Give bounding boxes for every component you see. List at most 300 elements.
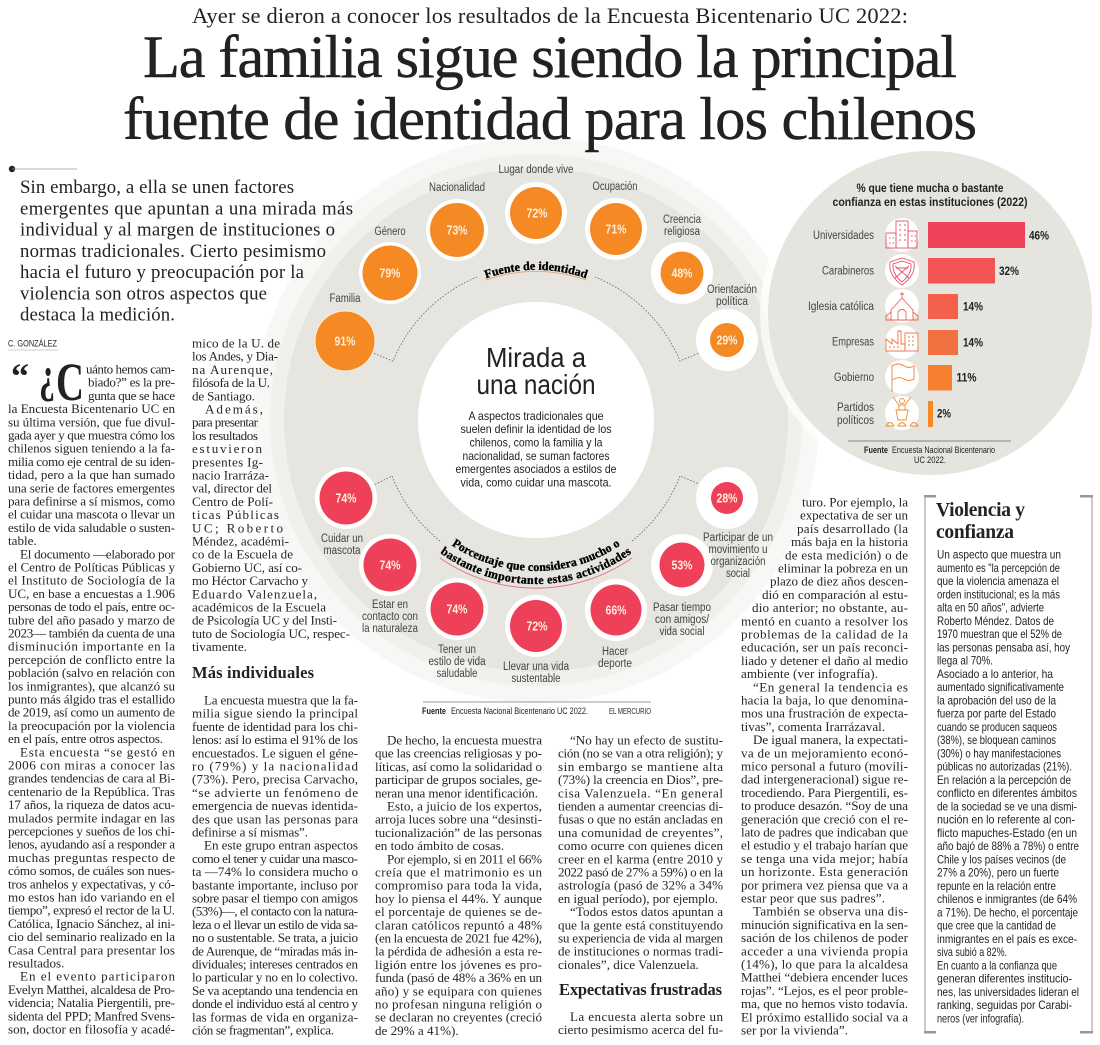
activity: Participar de un movimiento 28%: Participar de un [703,532,773,544]
article column 1: muchas preguntas respecto de [8,850,175,865]
article column 4: cisa Valenzuela. “En general [558,785,723,800]
article column 4: sin embargo se mantiene alta [558,759,723,774]
article column 2 bottom: ro (79%) y la nacionalidad [192,758,358,774]
row: Iglesia católica 14%: 14% [963,300,983,314]
infographic source line: Fuente [422,706,446,717]
activity: Tener un estilo saludable 74%: estilo de vida [428,656,486,668]
activity: Estar en contacto 74%: Estar en [372,599,408,611]
row: Carabineros 32% [822,254,1019,288]
article column 1: percepciones y sueños de los chi- [8,824,175,839]
article column 2 top: co de la Escuela de [192,547,293,562]
article column 5: mentó en cuanto a resolver los [741,613,908,628]
article column 1: en el país, entre otros aspectos. [8,731,163,746]
article column 5: tivas”, comenta Irarrázaval. [741,719,885,734]
article column 4: fusas o que no están ancladas en [558,812,723,827]
row: Empresas 14% [832,325,983,359]
panel text: siva subió a 82%. [937,945,1007,959]
article column 5: También se observa una dis- [753,904,908,919]
article column 2 bottom: (53%)—, el contacto con la natura- [192,904,358,919]
panel text: fuerza por parte del Estado [937,706,1056,720]
article column 2 bottom: En este grupo entran aspectos [204,838,358,853]
infographic background: concentric rings [253,137,1100,703]
row: Partidos políticos 2%: Partidos [837,402,874,414]
article column 5: generación que creció con el re- [741,811,908,826]
row: Partidos políticos 2%: 2% [937,406,951,420]
article column 3: creía que el matrimonio es un [375,864,542,880]
article column 5: de esta medición) o de [785,547,908,562]
heading: Expectativas frustradas: Expectativas frustradas [559,980,723,999]
article column 3: en todo ámbito de cosas. [375,838,504,853]
article column 3: la pérdida de adhesión a esta re- [375,944,542,959]
article column 1: el cuidar una mascota o llevar un [8,507,175,522]
panel text: cuando se producen saqueos [937,720,1057,734]
lead paragraph: destaca la medición. [20,304,175,326]
panel text: repunte en la relación entre [937,879,1056,893]
article column 1: mo estos han ido variando en el [8,890,175,905]
activity: Participar de un movimiento 28%: movimiento u [708,544,768,556]
article column 2 bottom: emergencia de nuevas identida- [192,798,358,813]
article column 4: tienden a aumentar creencias di- [558,798,723,814]
panel: Violencia y confianza [924,495,1093,1034]
panel text: conflicto en diferentes ámbitos [937,786,1077,800]
article column 3: compromiso para toda la vida, [375,878,542,893]
article column 2 bottom: sobre pasar el tiempo con amigos [192,890,358,906]
identity: Nacionalidad 73%: 73% [446,224,468,238]
article column 5: mico personal a futuro (movili- [741,758,908,774]
article column 5: dad intergeneracional) sigue re- [741,772,908,787]
chart title: % que tiene mucha o bastante [856,181,1004,195]
article column 4: como ocurre con quienes dicen [558,838,723,853]
activity: Cuidar un mascota 74%: mascota [324,545,361,557]
panel text: En relación a la percepción de [937,773,1071,787]
article column 4: creer en el karma (entre 2010 y [558,851,723,866]
article column 2 bottom: lo particular y no en lo colectivo. [192,970,358,985]
article column 5: minución significativa en la sen- [741,917,908,932]
activity: Cuidar un mascota 74% [315,467,377,557]
center description: vida, como cuidar una mascota. [460,476,612,490]
identity: Familia 91% [314,293,376,372]
infographic source line: EL MERCURIO [609,706,651,716]
article column 3: participar de grupos sociales, ge- [375,772,542,787]
article column 1: su última versión, que fue divul- [8,414,175,429]
article column 3: se declaran no creyentes (creció [375,1010,542,1025]
article column 1: la preocupación por la violencia [8,718,175,733]
article column 5: acceder a una vivienda propia [741,943,908,958]
article column 1: videncia; Natalia Piergentili, pre- [8,995,175,1010]
article column 1: Evelyn Matthei, alcaldesa de Pro- [8,982,175,997]
article column 3: el porcentaje de quienes se de- [375,904,542,919]
activity: Participar de un movimiento 28%: social [726,568,750,580]
article column 5: liado y detener el daño al medio [741,653,908,668]
article column 2 top: Centro de Polí- [192,494,273,509]
article column 5: ambiente (ver infografía). [741,666,878,681]
identity: Lugar donde vive 72%: Lugar donde vive [498,164,574,176]
center description: suelen definir la identidad de los [460,422,612,436]
article column 1: Esta encuesta “se gestó en [20,744,175,759]
panel text: llega al 70%. [937,654,993,668]
article column 1: Católica, Ignacio Sánchez, al ini- [8,916,175,931]
article column 2 bottom: dividuales; intereses centrados en [192,956,358,972]
identity: Nacionalidad 73%: Nacionalidad [429,182,485,194]
article column 2 bottom: de Aurenque, de “miradas más in- [192,943,358,958]
row: Carabineros 32%: Carabineros [822,266,874,278]
panel text: (38%), se bloquean caminos [937,733,1056,747]
chart source: Encuesta Nacional Bicentenario [892,445,995,455]
lead marker [9,166,77,172]
center text: Mirada a una nación: Mirada a [486,342,586,373]
article column 1: tros anhelos y expectativas, y có- [8,876,175,891]
article column 5: ser por la vivienda”. [741,1023,848,1038]
article column 2 bottom: leza o el llevar un estilo de vida sa- [192,917,358,932]
panel text: alta en 50 años", advierte [937,600,1044,614]
article column 2 top: na Aurenque, [192,362,273,377]
article column 4: su experiencia de vida al margen [558,930,723,946]
article column 2 top: ticas Públicas [192,507,279,522]
activity: Hacer deporte 66% [585,579,647,670]
article column 2 top: filósofa de la U. [192,375,270,390]
lead paragraph [20,177,353,326]
article column 5: más baja en la historia [791,534,908,549]
article column 5: dió en comparación al estu- [762,587,908,602]
article column 2 bottom: lenos: así lo estima el 91% de los [192,732,358,747]
activity: Cuidar un mascota 74%: Cuidar un [321,533,363,545]
article column 1: los inmigrantes), que alcanzó su [8,678,175,693]
article column 1: estilo de vida saludable o susten- [8,520,175,535]
article column 1: cómo somos, de cuáles son nues- [8,863,175,878]
article column 1: disminución importante en la [8,639,175,654]
row: Iglesia católica 14%: Iglesia católica [808,301,875,313]
row: Partidos políticos 2%: políticos [837,415,874,427]
article column 3: no profesan ninguna religión o [375,996,542,1012]
article column 1: chilenos siguen teniendo a la fa- [8,441,175,456]
article column 2 top: académicos de la Escuela [192,600,326,614]
activity: Participar de un movimiento 28%: 28% [716,492,738,506]
article column 1: el Centro de Políticas Públicas y [8,560,175,574]
activity: Llevar una vida sustentable 72% [503,595,570,685]
panel heading [936,500,1025,543]
article column 1: punto más álgido tras el estallido [8,692,175,706]
article column 5: De igual manera, la expectati- [753,732,908,747]
heading: Porcentaje que considera: Porcentaje que considera mucho o [452,538,620,572]
article column 2 bottom: Se va aceptando una tendencia en [192,983,358,998]
article column 2 top: de Psicología UC y del Insti- [192,613,337,628]
activity: Tener un estilo saludable 74%: 74% [446,602,468,616]
article column 1: lenos, ayudando así a responder a [8,837,175,852]
activity: Pasar tiempo con amigos 53%: Pasar tiempo [653,602,711,614]
article column 4: (73%) la creencia en Dios”, pre- [558,772,723,787]
article column 1: uánto hemos cam- [86,362,175,376]
panel frame [924,495,1093,1034]
article column 3: año) y se equipara con quienes [375,983,542,998]
article column 1: tiempo”, expresó el rector de la U. [8,903,175,918]
panel text: públicas no autorizadas (21%). [937,760,1072,774]
article column 4: ción (no se van a otra religión); y [558,746,723,761]
article column 2 bottom: fuente de identidad para los chi- [192,719,358,734]
drop cap [11,346,84,412]
article column 4: “Todos estos datos apuntan a [570,904,723,919]
identity: Creencia religiosa 48%: 48% [672,266,692,280]
article column 2 top: los resultados [192,428,258,443]
identity: Creencia religiosa 48%: Creencia [663,214,701,226]
activity: Llevar una vida sustentable 72%: 72% [526,620,548,634]
row: Universidades 46%: Universidades [813,230,874,242]
panel text: orden institucional; es la más [937,587,1060,601]
article column 2 top: Gobierno UC, así co- [192,560,302,575]
article column 5: se tenga una vida mejor; había [741,851,908,866]
identity: Ocupación 71%: 71% [606,222,626,236]
article column 1: UC, en base a encuestas a 1.906 [8,586,175,601]
panel text: chilenos e inmigrantes (de 64% [937,892,1077,906]
identity: Familia 91%: Familia [330,293,361,305]
identity: Ocupación 71% [585,181,647,260]
activity: Llevar una vida sustentable 72%: sustentable [512,673,560,685]
article column 2 bottom: donde el individuo está al centro y [192,996,358,1011]
article column 2 top: tuto de Sociología UC, respec- [192,626,350,641]
article column 1: tubre del año pasado y marzo de [8,612,175,627]
article column 5: turo. Por ejemplo, la [802,494,908,510]
article column 2 top: Eduardo Valenzuela, [192,586,317,601]
article column 4: que la gente está constituyendo [558,917,723,932]
article column 5: hacia la baja, lo que denomina- [741,692,908,708]
article column 5: trocediendo. Para Piergentili, es- [741,785,908,800]
panel text: Un aspecto que muestra un [937,548,1061,562]
article column 3: funda (pasó de 48% a 36% en un [375,970,542,985]
identity: Nacionalidad 73% [426,182,488,261]
center description: emergentes asociados a estilos de [456,462,617,476]
panel heading: Violencia y [936,500,1025,521]
article column 5: Matthei “debiera encender luces [741,970,908,985]
article column 2 top: de Santiago. [192,388,255,403]
article column 2 bottom: (73%). Pero, precisa Carvacho, [192,772,358,787]
identity: Orientación política 29%: Orientación [707,284,757,296]
article column 1: personas de todo el país, entre oc- [8,599,175,614]
identity: Orientación política 29% [696,284,758,371]
article column 1: población (salvo en relación con [8,665,175,680]
article column 1: Casa Central para presentar los [8,942,175,957]
drop cap: C [56,352,84,412]
panel: confidence in institutions chart [768,151,1092,475]
drop cap: ¿ [39,346,55,402]
article column 3: que las creencias religiosas y po- [375,746,542,761]
center description: nacionalidad, se suman factores [462,449,610,463]
article column 2 bottom: no o sustentable. Se trata, a juicio [192,930,358,945]
lead paragraph: hacia el futuro y preocupación por la [20,262,305,283]
article column 2 bottom: des que usan las personas para [192,811,358,826]
article column 3: neran una menor identificación. [375,785,538,800]
article column 1: son, doctor en filosofía y acadé- [8,1022,175,1037]
activity: Tener un estilo saludable 74%: Tener un [438,644,476,656]
article column 5: país desarrollado (la [797,521,908,536]
kicker: Ayer se dieron a conocer los resultados de la Encuesta Bicentenario UC 2022: [192,3,908,28]
article column 1: de 2019, así como un aumento de [8,705,175,720]
article column 5: un horizonte. Esta generación [741,864,908,879]
article column 2 top: UC; Roberto [192,520,283,535]
article column 5: to produce desazón. “Soy de una [741,798,908,813]
article column 1: 17 años, la riqueza de datos acu- [8,797,175,812]
article column 3: Por ejemplo, si en 2011 el 66% [387,851,542,866]
identity: Género 79%: Género [374,226,406,238]
title: fuente de identidad para los chilenos [123,86,977,153]
row: Empresas 14%: Empresas [832,336,874,348]
row: Partidos políticos 2% [837,396,951,430]
byline: C. GONZÁLEZ [8,338,57,350]
article column 3: arroja luces sobre una “desinsti- [375,812,542,827]
activity: Estar en contacto 74%: contacto con [362,611,418,623]
article column 5: rojas”. “Lejos, es el peor proble- [741,983,908,998]
panel text: aumento es "la percepción de [937,561,1060,575]
identity: Género 79%: 79% [380,266,400,280]
lead paragraph: Sin embargo, a ella se unen factores [20,177,294,198]
title: La familia sigue siendo la principal [143,24,957,91]
panel text: inmigrantes en el país es exce- [937,932,1077,946]
article column 5: (14%), lo que para la alcaldesa [741,957,908,972]
activity: Llevar una vida sustentable 72%: Llevar una vida [503,661,570,673]
article column 2 top: Méndez, académi- [192,534,289,548]
panel text: aumentado significativamente [937,680,1064,694]
article column 5: educación, ser un país reconci- [741,640,908,655]
identity: Creencia religiosa 48% [651,214,713,304]
article column 1: sidenta del PPD; Manfred Svens- [8,1008,175,1023]
identity: Lugar donde vive 72%: 72% [526,206,548,220]
article column 5: dio anterior; no obstante, au- [752,600,908,615]
panel text: neros (ver infografía). [937,1011,1024,1025]
article column 4: en igual período), por ejemplo. [558,891,718,906]
article column 1: centenario de la República. Tras [8,784,175,799]
article column 2 bottom: La encuesta muestra que la fa- [204,692,358,708]
heading: Fuente de identidad: Fuente de identidad [483,261,588,278]
chart title: confianza en estas instituciones (2022) [832,195,1028,209]
article column 3: ligión entre los jóvenes es pro- [375,957,542,972]
article column 2 top: val, director del [192,481,272,496]
panel text: ranking, seguidas por Carabi- [937,998,1072,1012]
row: Gobierno 11% [834,360,977,394]
lead paragraph: violencia son otros aspectos que [20,284,267,304]
article column 5: expectativa de ser un [800,508,908,523]
article column 5: va de un mejoramiento econó- [741,745,908,760]
identity: Orientación política 29%: 29% [716,334,738,348]
row: Gobierno 11%: Gobierno [834,372,874,384]
article column 2 top: mo Héctor Carvacho y [192,573,308,588]
article column 5: plazo de diez años descen- [770,574,908,589]
chart title [832,181,1028,209]
article column 1: tidad, pero a la que han sumado [8,467,175,482]
identity: Género 79% [359,226,421,304]
article column 4 end: cierto pesimismo acerca del fu- [558,1022,723,1037]
panel text: nución en lo referente al con- [937,812,1075,826]
chart source [848,441,1011,465]
article column 4: de instituciones o normas tradi- [558,944,723,959]
article column 3: líticas, así como la solidaridad o [375,759,542,774]
lead paragraph: emergentes que apuntan a una mirada más [20,198,353,220]
lead paragraph: normas tradicionales. Cierto pesimismo [20,241,326,262]
article column 2 top: los Andes, y Dia- [192,349,278,364]
article column 2 bottom: encuestados. Le siguen el géne- [192,745,358,760]
row: Carabineros 32%: 32% [999,264,1019,278]
center description: chilenos, como la familia y la [470,436,603,450]
article column 1: cio del seminario realizado en la [8,929,175,944]
article column 1: gada ayer y que muestra cómo los [8,428,175,442]
activity: Hacer deporte 66%: Hacer [602,646,628,658]
panel text: Chile y los países vecinos (de [937,852,1066,866]
article column 1: una serie de factores emergentes [8,480,175,495]
row: Gobierno 11%: 11% [956,370,977,384]
activity: Cuidar un mascota 74%: 74% [336,492,356,506]
activity: Hacer deporte 66%: deporte [598,658,632,670]
article column 2 bottom: ta —74% lo considera mucho o [192,864,358,879]
activity: Tener un estilo saludable 74% [426,578,488,680]
infographic source line [422,702,651,717]
row: Empresas 14%: 14% [963,336,983,350]
center description [456,409,617,490]
activity: Estar en contacto 74%: la naturaleza [362,623,419,635]
panel text: Asociado a lo anterior, ha [937,667,1053,681]
article column 4: “No hay un efecto de sustitu- [570,732,723,748]
activity: Participar de un movimiento 28% [696,467,773,580]
article column 3: Esto, a juicio de los expertos, [387,798,542,814]
article column 2 top: tivamente. [192,639,247,654]
row: Universidades 46%: 46% [1029,228,1049,242]
article column 3: claran católicos repuntó a 48% [375,917,542,932]
panel text: 1970 muestran que el 52% de [937,627,1062,641]
article column 1: El documento —elaborado por [20,546,176,561]
article column 1: 2006 con miras a conocer las [8,758,175,773]
panel text: las personas pensaba así, hoy [937,640,1070,654]
article column 3: (en la encuesta de 2021 fue 42%), [375,930,542,946]
article column 5: eliminar la pobreza en un [778,560,908,576]
article column 1: resultados. [8,956,64,971]
panel text: En cuanto a la confianza que [937,958,1057,972]
article column 5: mos una frustración de expecta- [741,706,908,721]
panel text: la aprobación del uso de la [937,693,1056,707]
article column 1: milia como eje central de su iden- [8,454,175,469]
article column 4: cionales”, dice Valenzuela. [558,957,699,972]
identity: Familia 91%: 91% [334,334,356,348]
panel text: que la violencia amenaza el [937,574,1059,588]
article column 2 top: mico de la U. de [192,336,280,350]
title [123,24,977,153]
panel text: Roberto Méndez. Datos de [937,614,1054,628]
article column 2 top: para presentar [192,415,259,430]
identity: Orientación política 29%: política [716,296,749,308]
activity: Pasar tiempo con amigos 53%: 53% [672,558,692,572]
article column 4: una comunidad de creyentes”, [558,825,723,840]
article column 2 bottom: como el tener y cuidar una masco- [192,851,358,866]
article column 3: hoy lo piensa el 44%. Y aunque [375,891,542,906]
article column 5: El próximo estallido social va a [741,1009,908,1024]
panel heading: confianza [936,522,1014,543]
connector lines: dashed arcs [373,277,699,541]
article column 2 bottom: bastante importante, incluso por [192,877,359,892]
panel text: flicto mapuches-Estado (en un [937,826,1077,840]
article column 2 top: presentes Ig- [192,454,263,469]
article column 5: por primera vez piensa que va a [741,877,908,892]
lead paragraph: individual y al margen de instituciones o [20,220,335,240]
article column 1: la Encuesta Bicentenario UC en [8,401,175,416]
article column 1: para definirse a sí mismos, como [8,494,175,508]
activity: Pasar tiempo con amigos 53%: con amigos/ [655,614,710,626]
identity: Creencia religiosa 48%: religiosa [664,226,701,238]
article column 2 bottom: definirse a sí mismas”. [192,824,308,840]
article column 5: lato de padres que indicaban que [741,824,908,840]
article column 3: De hecho, la encuesta muestra [387,732,542,748]
activity: Pasar tiempo con amigos 53%: vida social [660,626,704,638]
article column 3: de 29% a 41%). [375,1023,459,1038]
activity: Participar de un movimiento 28%: organización [710,556,766,568]
article column 1: table. [8,533,37,548]
panel text: generan diferentes institucio- [937,972,1072,986]
activity: Estar en contacto 74% [359,534,421,635]
article column 4: 2022 pasó de 27% a 59%) o en la [558,864,723,880]
